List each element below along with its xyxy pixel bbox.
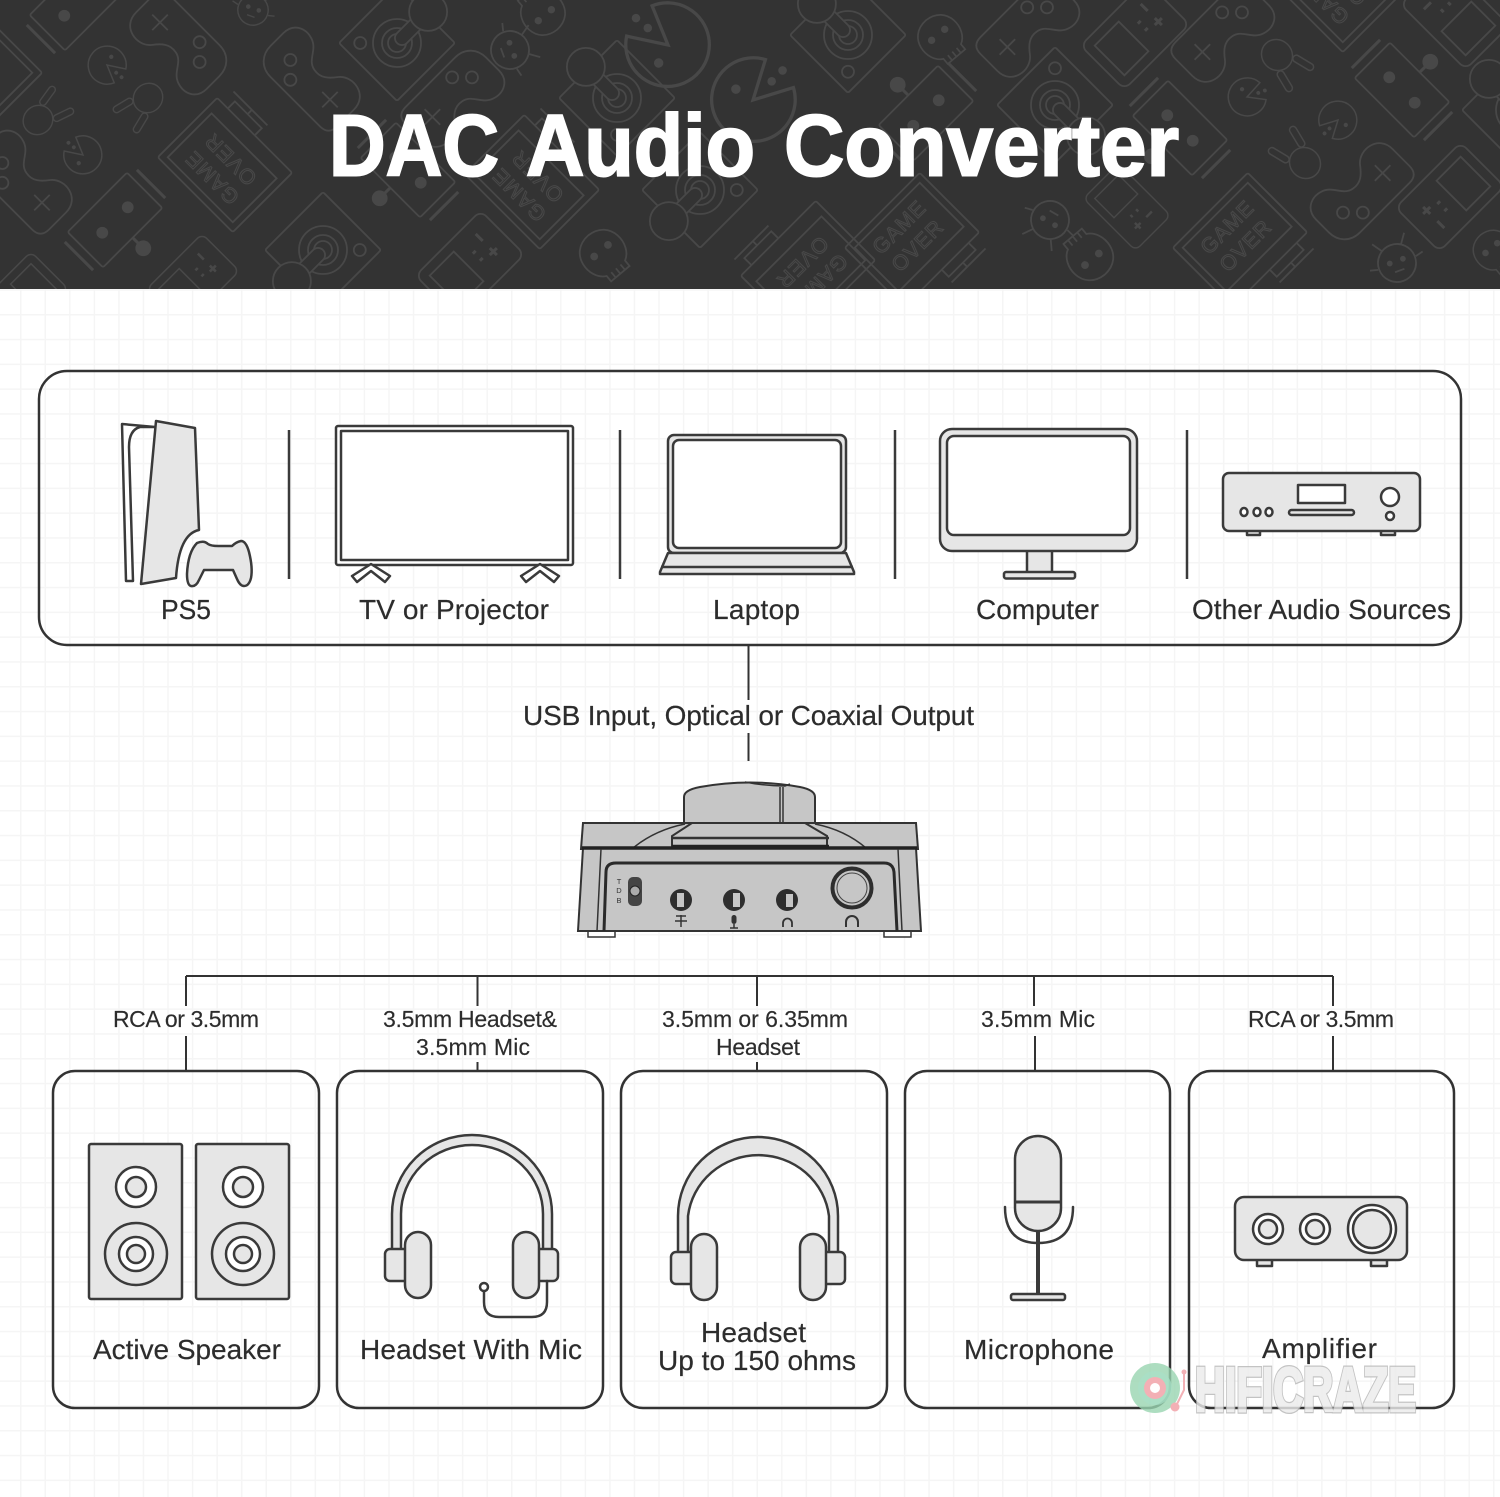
panel: active speaker [53,1071,319,1408]
icon: DAC audio converter: T [617,877,622,886]
icon: headset with microphone [385,1135,558,1317]
title: Converter [784,98,1179,194]
label: Headset up to 150 ohms [658,1317,856,1376]
title: Audio [526,98,755,194]
icon: DAC audio converter: D [616,886,622,895]
label: Other Audio Sources: Other Audio Sources [1192,594,1451,625]
label: 3.5mm or 6.35mm Headset: Headset [716,1034,801,1060]
icon: speakers [89,1144,289,1299]
label: RCA or 3.5mm amplifier: RCA or 3.5mm [1248,1006,1394,1032]
icon: TV or projector [336,426,573,582]
panel: microphone [905,1071,1170,1408]
panel: headset with mic [337,1071,603,1408]
connector tree: DAC to outputs [186,976,1333,1071]
panel: headset [621,1071,887,1408]
label: USB input: USB Input, Optical or Coaxial Output [523,700,974,731]
title [329,98,1179,194]
watermark: HIFICRAZE logo [1130,1356,1416,1425]
label: Active Speaker: Active Speaker [93,1334,281,1365]
label: TV or Projector: TV or Projector [359,594,549,625]
game icon background pattern: GAME [488,163,551,226]
connector: sources to DAC [748,645,750,761]
game icon background pattern [0,0,1500,344]
panel: amplifier [1189,1071,1454,1408]
label: 3.5mm Mic: 3.5mm Mic [981,1006,1095,1032]
panel: audio sources [39,371,1461,645]
label: 3.5mm Headset and Mic [383,1006,557,1060]
label: 3.5mm or 6.35mm Headset [662,1006,848,1060]
icon: DAC audio converter [578,782,921,937]
icon: computer monitor [940,429,1137,578]
game icon background pattern: OVER [771,231,833,293]
label: 3.5mm Headset and Mic: 3.5mm Headset& [383,1006,557,1032]
game icon background pattern: OVER [887,215,949,277]
label: 3.5mm or 6.35mm Headset: 3.5mm or 6.35mm [662,1006,848,1032]
game icon background pattern: GAME [789,249,852,312]
icon: DAC audio converter: B [616,896,622,905]
game icon background pattern: GAME [868,196,931,259]
label: Microphone: Microphone [964,1334,1114,1365]
label: Laptop: Laptop [713,594,800,625]
icon: microphone [1005,1136,1073,1300]
game icon background pattern: GAME [1196,196,1259,259]
label: Headset up to 150 ohms: Up to 150 ohms [658,1345,856,1376]
header banner [0,0,1500,344]
game icon background pattern: OVER [507,145,569,207]
icon: laptop [660,435,854,574]
label: Computer: Computer [976,594,1099,625]
label: 3.5mm Headset and Mic: 3.5mm Mic [416,1034,530,1060]
label: PS5: PS5 [161,594,211,625]
label: Headset up to 150 ohms: Headset [701,1317,806,1348]
game icon background pattern: GAME [181,146,244,209]
label: Headset With Mic: Headset With Mic [360,1334,582,1365]
game icon background pattern: OVER [200,128,262,190]
title: DAC [329,98,499,194]
icon: other audio source unit [1223,473,1420,535]
label: Amplifier: Amplifier [1262,1333,1377,1364]
label: RCA or 3.5mm: RCA or 3.5mm [113,1006,259,1032]
icon: PS5 console and controller [122,421,252,586]
icon: headphones [671,1137,845,1300]
game icon background pattern: OVER [1215,215,1277,277]
icon: amplifier [1235,1197,1407,1266]
